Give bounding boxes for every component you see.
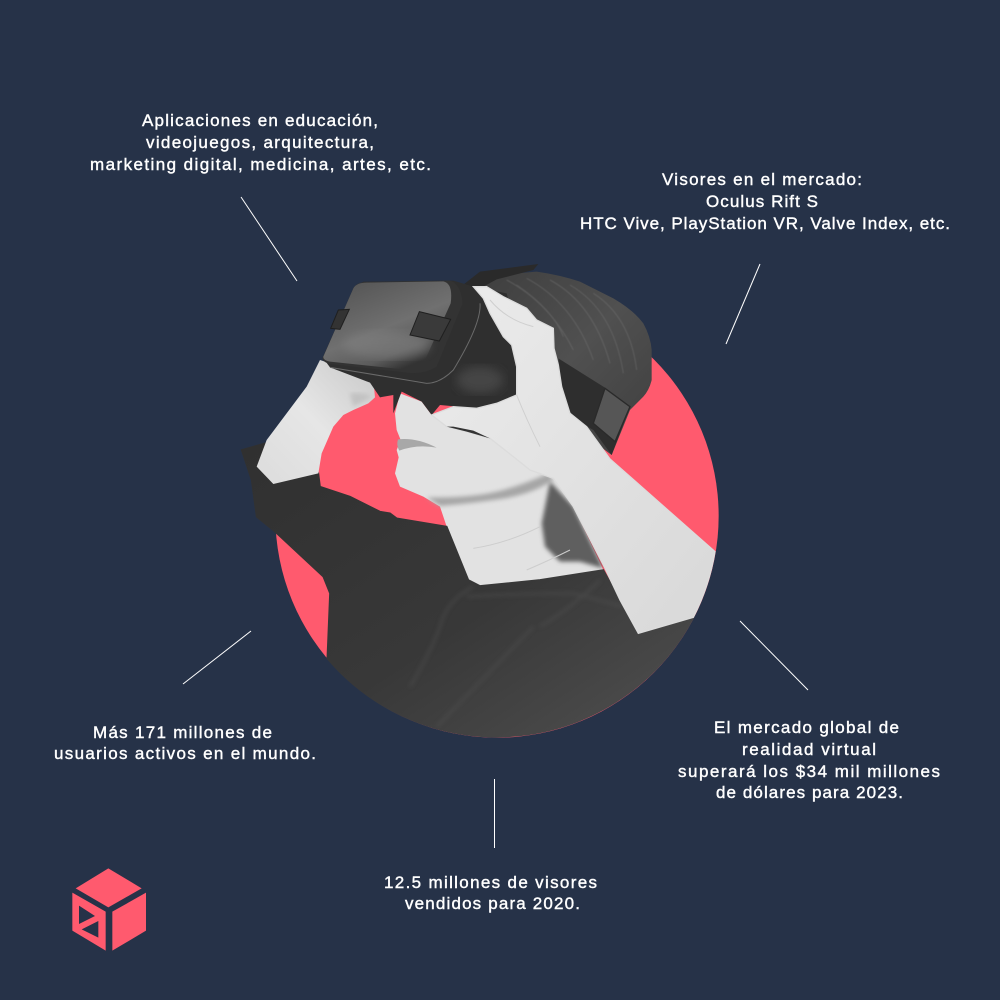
text: mercado global: realidad virtual	[742, 740, 876, 759]
headset outline seam	[330, 303, 480, 383]
text: aplicaciones: videojuegos, arquitectura,	[146, 133, 374, 152]
cube top	[76, 868, 142, 907]
hair streaks	[507, 278, 637, 373]
shirt folds	[410, 580, 623, 727]
text: mercado global: superará los $34 mil millones	[678, 762, 940, 781]
mouth	[397, 439, 437, 451]
text: aplicaciones: marketing digital, medicina, artes, etc.	[90, 155, 431, 174]
headset right clip	[410, 312, 451, 341]
red circle	[275, 294, 719, 738]
text: usuarios: Más 171 millones de	[93, 723, 272, 742]
hand crease	[490, 300, 540, 447]
headset front plate	[323, 281, 451, 370]
headset body	[323, 281, 523, 415]
text: aplicaciones	[90, 111, 431, 174]
text: mercado global: El mercado global de	[714, 718, 899, 737]
cube left face	[72, 893, 106, 951]
strap buckle	[593, 388, 630, 442]
left arm and fist	[257, 360, 375, 484]
side strap	[558, 358, 630, 455]
neck crease	[473, 527, 570, 570]
text: aplicaciones: Aplicaciones en educación,	[142, 111, 378, 130]
neck hair	[542, 482, 603, 568]
text: usuarios	[54, 723, 316, 763]
hair	[480, 272, 652, 455]
headset lower highlight	[457, 367, 503, 393]
cube right face	[112, 893, 146, 951]
photo: woman wearing VR headset on red circle	[242, 264, 719, 738]
shirt	[242, 443, 693, 737]
text: visores: Oculus Rift S	[706, 192, 818, 211]
text: usuarios: usuarios activos en el mundo.	[54, 744, 316, 763]
headset panel highlight	[343, 332, 430, 358]
connector lines	[183, 197, 808, 848]
head strap	[462, 264, 538, 292]
right hand and arm	[432, 287, 715, 633]
thumb shadow	[447, 427, 490, 438]
text: visores vendidos: 12.5 millones de visores	[384, 873, 597, 892]
face and neck	[395, 393, 603, 586]
text: visores: Visores en el mercado:	[662, 170, 862, 189]
headset front panel	[323, 281, 463, 373]
text: visores vendidos: vendidos para 2020.	[405, 894, 580, 913]
headset left clip	[331, 309, 349, 329]
text: visores vendidos	[384, 873, 597, 913]
text: visores: HTC Vive, PlayStation VR, Valve Index, etc.	[580, 214, 950, 233]
fist knuckle shading	[350, 393, 372, 407]
text: mercado global	[678, 718, 940, 802]
jaw shadow	[427, 473, 553, 506]
text: mercado global: de dólares para 2023.	[716, 783, 903, 802]
logo: cube	[72, 868, 146, 951]
text: visores	[580, 170, 950, 233]
